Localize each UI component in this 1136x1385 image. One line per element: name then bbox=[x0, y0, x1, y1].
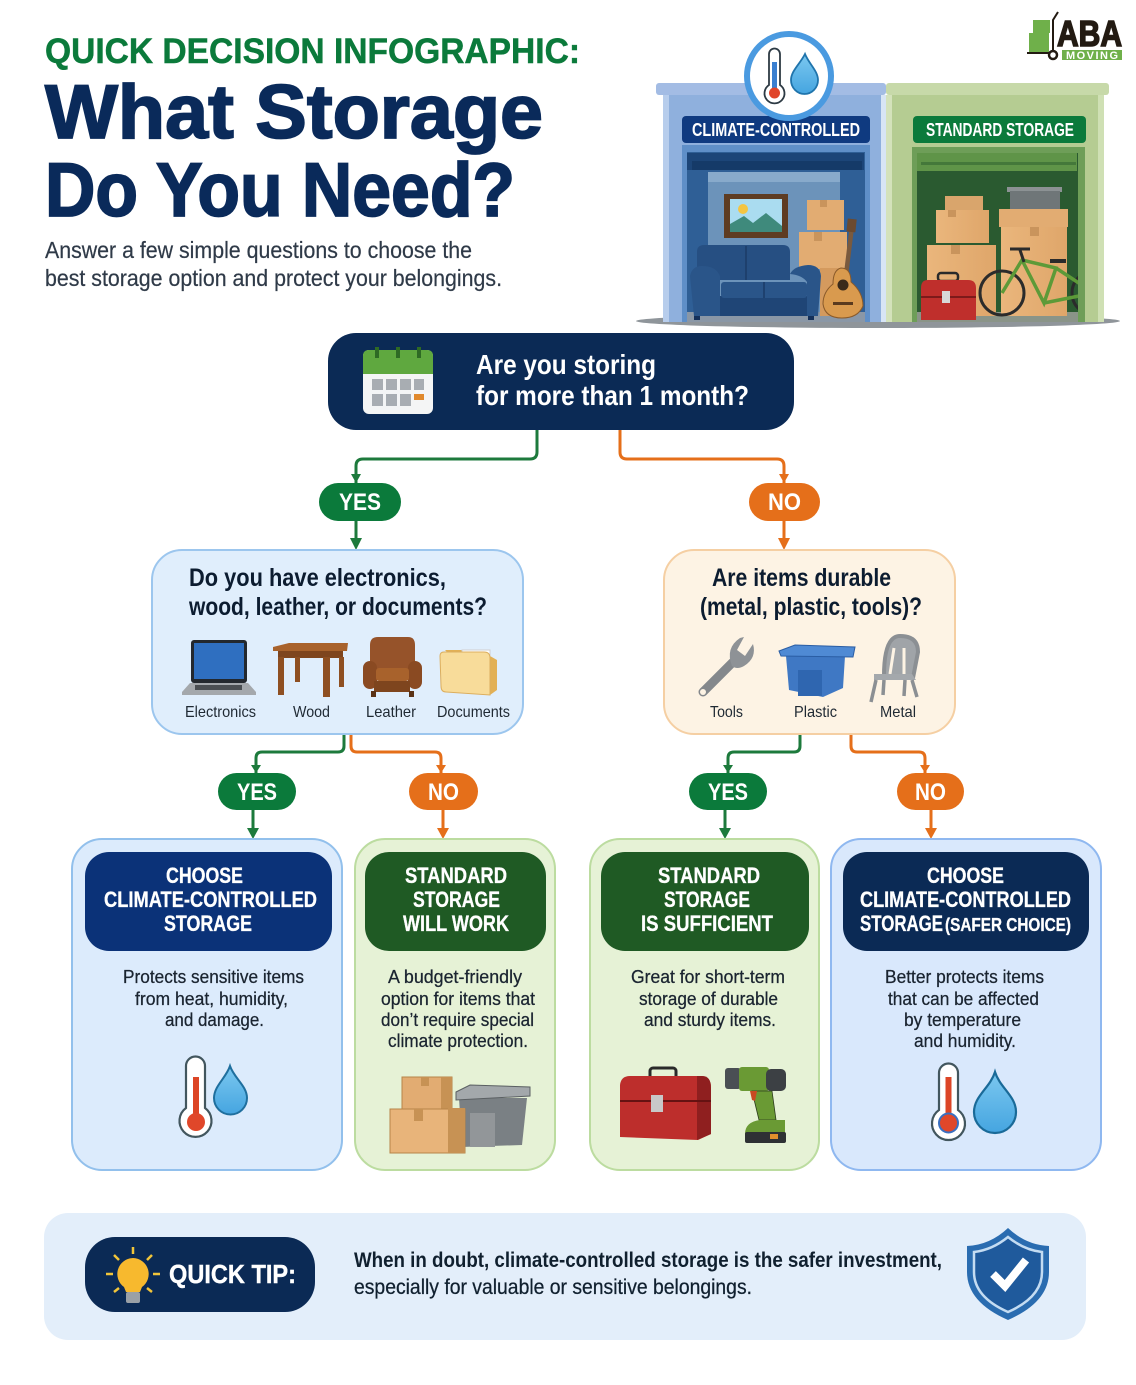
climate label bbox=[682, 116, 870, 143]
item labels: Documents bbox=[437, 704, 510, 721]
panel: choose climate-controlled storage: from heat, humidity, bbox=[135, 989, 288, 1009]
icon: thermometer and drop bbox=[179, 1056, 247, 1137]
yes pill: YES bbox=[237, 779, 277, 806]
question: storing for more than 1 month: for more than 1 month? bbox=[476, 380, 749, 411]
panel: choose climate-controlled, safer choice: that can be affected bbox=[888, 989, 1039, 1009]
kicker heading: QUICK DECISION INFOGRAPHIC: bbox=[45, 32, 580, 71]
panel: standard storage will work: STORAGE bbox=[413, 887, 500, 912]
item labels bbox=[185, 704, 510, 721]
panel: choose climate-controlled, safer choice: (SAFER CHOICE) bbox=[945, 914, 1071, 935]
panel: choose climate-controlled storage: CHOOSE bbox=[166, 863, 243, 888]
subtitle: best storage option and protect your belongings. bbox=[45, 265, 502, 291]
sofa bbox=[690, 245, 821, 320]
panel: standard storage will work bbox=[355, 839, 555, 1170]
panel: sensitive items question bbox=[152, 550, 523, 734]
item labels bbox=[710, 704, 916, 721]
stacked boxes bbox=[927, 187, 1068, 316]
yes pill: YES bbox=[339, 489, 381, 516]
icon: cordless drill bbox=[725, 1067, 786, 1143]
standard storage unit bbox=[886, 83, 1116, 322]
item labels: Electronics bbox=[185, 704, 256, 721]
tip text: especially for valuable or sensitive belongings. bbox=[354, 1276, 752, 1299]
main title: What Storage bbox=[45, 70, 543, 155]
panel: choose climate-controlled, safer choice bbox=[831, 839, 1101, 1170]
icon: light bulb bbox=[106, 1247, 160, 1303]
yes pill bbox=[689, 773, 767, 810]
item labels: Metal bbox=[880, 704, 916, 721]
panel: standard storage is sufficient: STANDARD bbox=[658, 863, 760, 888]
panel: standard storage will work: STANDARD bbox=[405, 863, 507, 888]
panel: choose climate-controlled storage: Protects sensitive items bbox=[123, 967, 304, 987]
panel: choose climate-controlled, safer choice: Better protects items bbox=[885, 967, 1044, 987]
panel: standard storage is sufficient: IS SUFFICIENT bbox=[641, 911, 773, 936]
icon: shield with check bbox=[967, 1228, 1049, 1320]
panel: choose climate-controlled storage bbox=[72, 839, 342, 1170]
panel: standard storage is sufficient: Great for short-term bbox=[631, 967, 785, 987]
connector: first no branch bbox=[620, 430, 790, 550]
no pill bbox=[749, 483, 820, 521]
item labels: Plastic bbox=[794, 704, 837, 721]
quick tip badge bbox=[85, 1237, 315, 1312]
panel: standard storage will work: WILL WORK bbox=[403, 911, 509, 936]
subtitle bbox=[45, 237, 502, 291]
connectors: second level left bbox=[247, 735, 449, 839]
panel: choose climate-controlled, safer choice: by temperature bbox=[904, 1010, 1021, 1030]
panel: standard storage is sufficient: storage of durable bbox=[639, 989, 778, 1009]
standard label bbox=[913, 116, 1086, 143]
panel: durable items question bbox=[664, 550, 955, 734]
tip text: When in doubt, climate-controlled storage is the safer investment, bbox=[354, 1249, 942, 1272]
panel: standard storage will work: don’t require special bbox=[381, 1010, 534, 1030]
connector: first yes branch bbox=[350, 430, 537, 550]
panel: choose climate-controlled, safer choice: and humidity. bbox=[914, 1031, 1016, 1051]
panel: standard storage is sufficient bbox=[590, 839, 819, 1170]
icon: thermometer and drop bbox=[932, 1064, 1016, 1140]
icon: laptop bbox=[182, 640, 256, 695]
item labels: Wood bbox=[293, 704, 330, 721]
panel: choose climate-controlled storage: and damage. bbox=[165, 1010, 264, 1030]
logo: ABA Moving: ABA bbox=[1057, 13, 1122, 54]
panel: standard storage will work: option for items that bbox=[381, 989, 535, 1009]
panel: durable items question: (metal, plastic, tools)? bbox=[700, 593, 922, 621]
logo: ABA Moving: MOVING bbox=[1066, 50, 1118, 62]
panel: choose climate-controlled, safer choice: CLIMATE-CONTROLLED bbox=[860, 887, 1071, 912]
no pill bbox=[409, 773, 478, 810]
item labels: Leather bbox=[366, 704, 417, 721]
panel: sensitive items question: Do you have electronics, bbox=[189, 564, 446, 592]
panel: durable items question: Are items durable bbox=[712, 564, 891, 592]
panel: standard storage is sufficient: STORAGE bbox=[664, 887, 750, 912]
item labels: Tools bbox=[710, 704, 743, 721]
yes pill: YES bbox=[708, 779, 748, 806]
icon: metal chair bbox=[871, 636, 918, 702]
logo: ABA Moving bbox=[1027, 12, 1122, 62]
red toolbox bbox=[921, 273, 976, 320]
question: storing for more than 1 month bbox=[328, 333, 794, 430]
green bicycle bbox=[978, 248, 1078, 316]
tip text bbox=[354, 1249, 942, 1299]
no pill: NO bbox=[768, 489, 801, 516]
icon: blue plastic bin bbox=[779, 645, 855, 697]
main title bbox=[45, 70, 543, 233]
yes pill bbox=[218, 773, 296, 810]
framed picture bbox=[724, 194, 788, 238]
standard label: STANDARD STORAGE bbox=[926, 120, 1074, 140]
icon: folder bbox=[440, 650, 497, 695]
connectors: second level right bbox=[719, 735, 937, 839]
quick tip badge: QUICK TIP: bbox=[169, 1259, 296, 1289]
no pill bbox=[897, 773, 964, 810]
subtitle: Answer a few simple questions to choose the bbox=[45, 237, 472, 263]
climate label: CLIMATE-CONTROLLED bbox=[692, 120, 860, 140]
climate-controlled unit bbox=[656, 34, 886, 322]
panel: standard storage will work: A budget-friendly bbox=[388, 967, 522, 987]
icon: boxes and grey bin bbox=[390, 1077, 530, 1153]
cardboard boxes bbox=[799, 200, 847, 316]
panel: choose climate-controlled storage: STORAGE bbox=[164, 911, 252, 936]
icon: leather armchair bbox=[363, 637, 422, 697]
icon: wrench bbox=[700, 637, 754, 695]
no pill: NO bbox=[915, 779, 946, 806]
panel: choose climate-controlled, safer choice: STORAGE bbox=[860, 911, 943, 936]
icon: red toolbox bbox=[620, 1068, 711, 1140]
panel: choose climate-controlled storage: CLIMATE-CONTROLLED bbox=[104, 887, 317, 912]
guitar bbox=[823, 219, 863, 318]
main title: Do You Need? bbox=[45, 148, 515, 233]
panel: standard storage will work: climate protection. bbox=[388, 1031, 528, 1051]
no pill: NO bbox=[428, 779, 459, 806]
panel: quick tip bbox=[44, 1213, 1086, 1340]
yes pill bbox=[319, 483, 401, 521]
panel: sensitive items question: wood, leather, or documents? bbox=[188, 593, 487, 621]
icon: calendar bbox=[363, 347, 433, 414]
question: storing for more than 1 month: Are you storing bbox=[476, 349, 656, 380]
icon: wooden table bbox=[273, 643, 348, 697]
panel: choose climate-controlled, safer choice: CHOOSE bbox=[927, 863, 1004, 888]
icon: thermometer and drop badge bbox=[747, 34, 831, 118]
panel: standard storage is sufficient: and sturdy items. bbox=[644, 1010, 776, 1030]
